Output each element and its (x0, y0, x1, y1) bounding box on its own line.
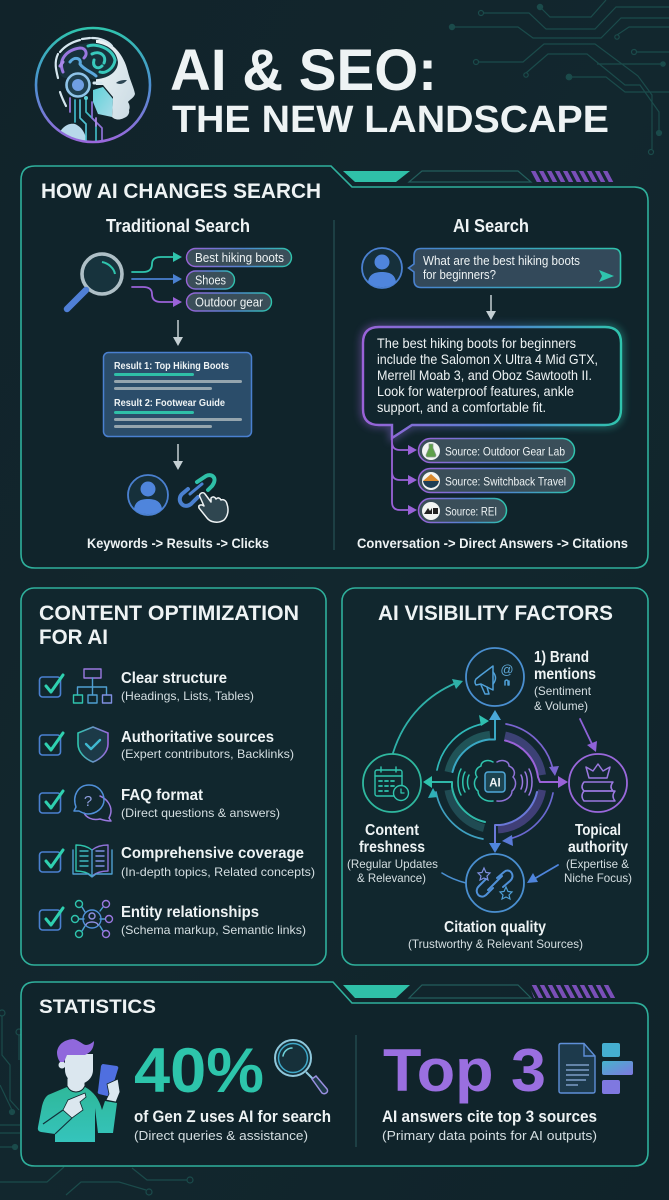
column: AI search (357, 216, 628, 551)
panel: statistics (21, 982, 648, 1166)
results card: Result 2: Footwear Guide (114, 397, 225, 409)
label: brand mentions: (Sentiment (534, 684, 592, 698)
text: top 3 stat (382, 1108, 597, 1143)
arrow: freshness to brand (393, 679, 463, 753)
row: FAQ format: FAQ format (121, 787, 203, 804)
answer bubble: support, and a comfortable fit. (377, 399, 546, 415)
source pill: outdoor gear lab: Source: Outdoor Gear Lab (445, 444, 565, 458)
row: FAQ format: (Direct questions & answers) (121, 806, 280, 820)
keyword pill: best hiking boots: Best hiking boots (195, 251, 284, 265)
row: comprehensive coverage (40, 845, 315, 879)
keyword pill: outdoor gear: Outdoor gear (195, 296, 263, 310)
keyword pill: shoes: Shoes (195, 274, 226, 288)
text: Gen Z stat: (Direct queries & assistance) (134, 1128, 308, 1143)
label: citation quality (408, 919, 583, 951)
label: citation quality: Citation quality (444, 919, 546, 936)
illustration: person with phone (38, 1039, 120, 1142)
cycle arrows inner (430, 718, 560, 845)
icon: magnifier (67, 254, 122, 309)
panel: AI visibility factors (342, 588, 648, 965)
question bubble: for beginners? (423, 267, 496, 282)
icon: user (362, 248, 402, 288)
label: topical authority: Topical (575, 822, 621, 839)
circuit traces: top right (449, 0, 669, 154)
answer bubble: Merrell Moab 3, and Oboz Sawtooth II. (377, 367, 592, 383)
label: topical authority: authority (568, 839, 628, 856)
row: authoritative sources (40, 727, 294, 762)
heading: traditional search: Traditional Search (106, 216, 250, 236)
arrows: keyword branches (132, 252, 182, 307)
label: topical authority (564, 822, 632, 885)
label: topical authority: Niche Focus) (564, 871, 632, 885)
label: content freshness: Content (365, 822, 419, 839)
label: content freshness: & Relevance) (357, 871, 426, 885)
row: clear structure: Clear structure (121, 670, 227, 687)
circuit traces: bottom left (0, 1010, 193, 1195)
node: content freshness (363, 754, 421, 812)
icon: AI head in circle (36, 28, 150, 143)
keyword pill: shoes (186, 271, 234, 289)
heading: AI search: AI Search (453, 216, 529, 236)
title: THE NEW LANDSCAPE (172, 99, 609, 141)
question bubble: What are the best hiking boots (423, 253, 580, 268)
row: entity relationships (40, 900, 306, 938)
icon: AI brain center: AI (489, 778, 501, 790)
results card (104, 352, 252, 436)
row: authoritative sources: (Expert contributors, Backlinks) (121, 747, 294, 761)
row: clear structure: (Headings, Lists, Tables) (121, 689, 254, 703)
stat: 40 percent: 40% (134, 1036, 264, 1106)
row: comprehensive coverage: (In-depth topics, Related concepts) (121, 865, 315, 879)
icon: magnifier (275, 1040, 328, 1094)
heading: content optimization: CONTENT OPTIMIZATION (39, 602, 299, 625)
answer bubble: The best hiking boots for beginners (377, 335, 576, 351)
panel: how AI changes search (21, 166, 648, 568)
icon: user (128, 475, 168, 515)
label: citation quality: (Trustworthy & Relevant Sources) (408, 937, 583, 951)
row: entity relationships: Entity relationships (121, 904, 259, 921)
label: brand mentions: 1) Brand (534, 649, 589, 666)
panel: content optimization (21, 588, 326, 965)
text: Gen Z stat (134, 1108, 331, 1143)
heading: content optimization (39, 602, 299, 649)
results card: Result 1: Top Hiking Boots (114, 360, 229, 372)
title (170, 38, 609, 141)
caption: traditional flow: Keywords -> Results -> Clicks (87, 535, 269, 551)
label: content freshness: (Regular Updates (347, 857, 438, 871)
source pill: switchback travel (418, 468, 574, 492)
label: content freshness: freshness (359, 839, 425, 856)
arrow: brand to authority (580, 719, 597, 752)
row: authoritative sources: Authoritative sources (121, 729, 274, 746)
icon: link and pointer (180, 475, 228, 522)
node: citation quality (466, 854, 524, 912)
cycle arrows outer (436, 724, 553, 839)
connector: freshness to citation (442, 873, 466, 883)
arrow: down to results (173, 320, 183, 346)
node: brand mentions (466, 648, 524, 706)
heading: AI visibility factors: AI VISIBILITY FACTORS (378, 602, 613, 625)
title: AI & SEO: (170, 38, 437, 103)
heading: statistics: STATISTICS (39, 996, 156, 1018)
keyword pill: outdoor gear (186, 293, 272, 311)
source pill: switchback travel: Source: Switchback Travel (445, 474, 566, 488)
arrow: down to clicks (173, 444, 183, 470)
heading: content optimization: FOR AI (39, 626, 108, 649)
row: comprehensive coverage: Comprehensive coverage (121, 845, 304, 862)
arrow: authority to citation (527, 865, 558, 883)
caption: AI flow: Conversation -> Direct Answers -> Citations (357, 535, 628, 551)
arrows: citation branches (392, 436, 417, 515)
icon: document and blocks (559, 1043, 633, 1094)
text: top 3 stat: AI answers cite top 3 sources (382, 1108, 597, 1126)
row: FAQ format (40, 785, 280, 821)
row: entity relationships: (Schema markup, Semantic links) (121, 923, 306, 937)
node: topical authority (569, 754, 627, 812)
arrow: down to answer (486, 295, 496, 320)
node: brand mentions: @ (500, 662, 514, 677)
answer bubble (363, 327, 621, 438)
row: FAQ format: ? (84, 793, 92, 810)
label: brand mentions: & Volume) (534, 699, 588, 713)
answer bubble: include the Salomon X Ultra 4 Mid GTX, (377, 351, 598, 367)
cycle diagram rings (448, 735, 542, 829)
source pill: REI (418, 498, 506, 522)
column: traditional search (67, 216, 292, 551)
cycle arrowheads (423, 710, 568, 853)
heading: how AI changes search: HOW AI CHANGES SEARCH (41, 179, 321, 203)
label: brand mentions: mentions (534, 666, 596, 683)
source pill: REI: Source: REI (445, 504, 497, 518)
stat: top 3: Top 3 (383, 1037, 546, 1104)
row: clear structure (40, 669, 254, 703)
text: Gen Z stat: of Gen Z uses AI for search (134, 1108, 331, 1126)
label: brand mentions (534, 649, 596, 713)
source pill: outdoor gear lab (418, 438, 574, 462)
icon: AI brain center (458, 761, 532, 801)
label: topical authority: (Expertise & (566, 857, 629, 871)
text: top 3 stat: (Primary data points for AI outputs) (382, 1128, 597, 1143)
answer bubble: Look for waterproof features, ankle (377, 383, 574, 399)
label: content freshness (347, 822, 438, 885)
question bubble (408, 248, 620, 288)
